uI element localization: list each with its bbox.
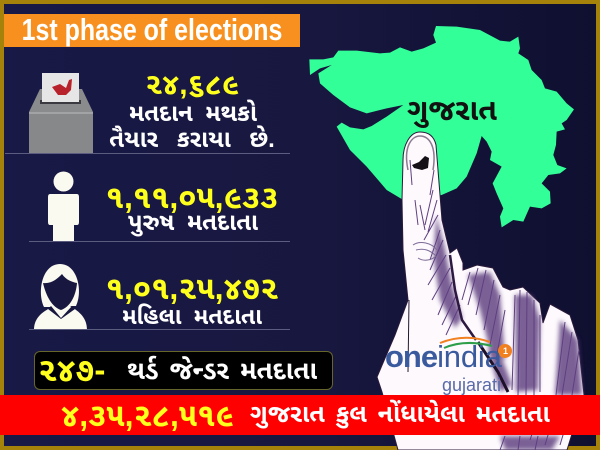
blurred purple shading: [434, 215, 582, 450]
stat: male voters: પુરુષ મતદાતા: [128, 209, 258, 236]
finger fold lines: [450, 255, 476, 340]
stat: male voters: [106, 179, 278, 236]
label: Gujarat: ગુજરાત: [407, 94, 497, 127]
stat: polling stations: ૨૪,૬૮૯: [145, 68, 239, 101]
stat: polling stations: મતદાન મથકો: [129, 100, 257, 127]
stat: male voters: ૧,૧૧,૦૫,૯૩૩: [106, 179, 278, 215]
stat: third gender voters: [34, 351, 333, 390]
fingernail outline: [407, 136, 434, 170]
knuckle wrinkles: [413, 243, 437, 260]
icon: woman: [34, 264, 87, 329]
stat: third gender voters: ૨૪૭-: [38, 351, 105, 388]
red total voters bar: ગુજરાત કુલ નોંધાયેલા મતદાતા: [250, 400, 550, 428]
stat: female voters: [106, 270, 278, 329]
stat: female voters: ૧,૦૧,૨૫,૪૭૨: [106, 270, 278, 306]
icon: man: [48, 172, 79, 241]
logo: oneindia gujarati: 1: [503, 346, 508, 356]
logo: oneindia gujarati: gujarati: [442, 375, 501, 395]
stat: polling stations: [109, 68, 275, 153]
stat: female voters: મહિલા મતદાતા: [122, 303, 262, 329]
logo: oneindia gujarati: oneindia: [385, 339, 502, 374]
logo: oneindia gujarati: [385, 336, 512, 395]
stat: polling stations: તૈયાર કરાયા છે.: [109, 126, 275, 153]
banner: 1st phase of elections: 1st phase of elections: [22, 12, 282, 47]
stat: third gender voters: થર્ડ જેન્ડર મતદાતા: [127, 355, 317, 385]
ink mark on fingernail: [412, 156, 429, 170]
red total voters bar: ૪,૩૫,૨૮,૫૧૯: [61, 397, 234, 433]
hand with raised finger: [377, 132, 584, 450]
map of Gujarat: [309, 26, 574, 227]
icon: ballot box: [29, 73, 93, 153]
red total voters bar: [0, 395, 600, 435]
finger shading streaks: [410, 160, 579, 450]
